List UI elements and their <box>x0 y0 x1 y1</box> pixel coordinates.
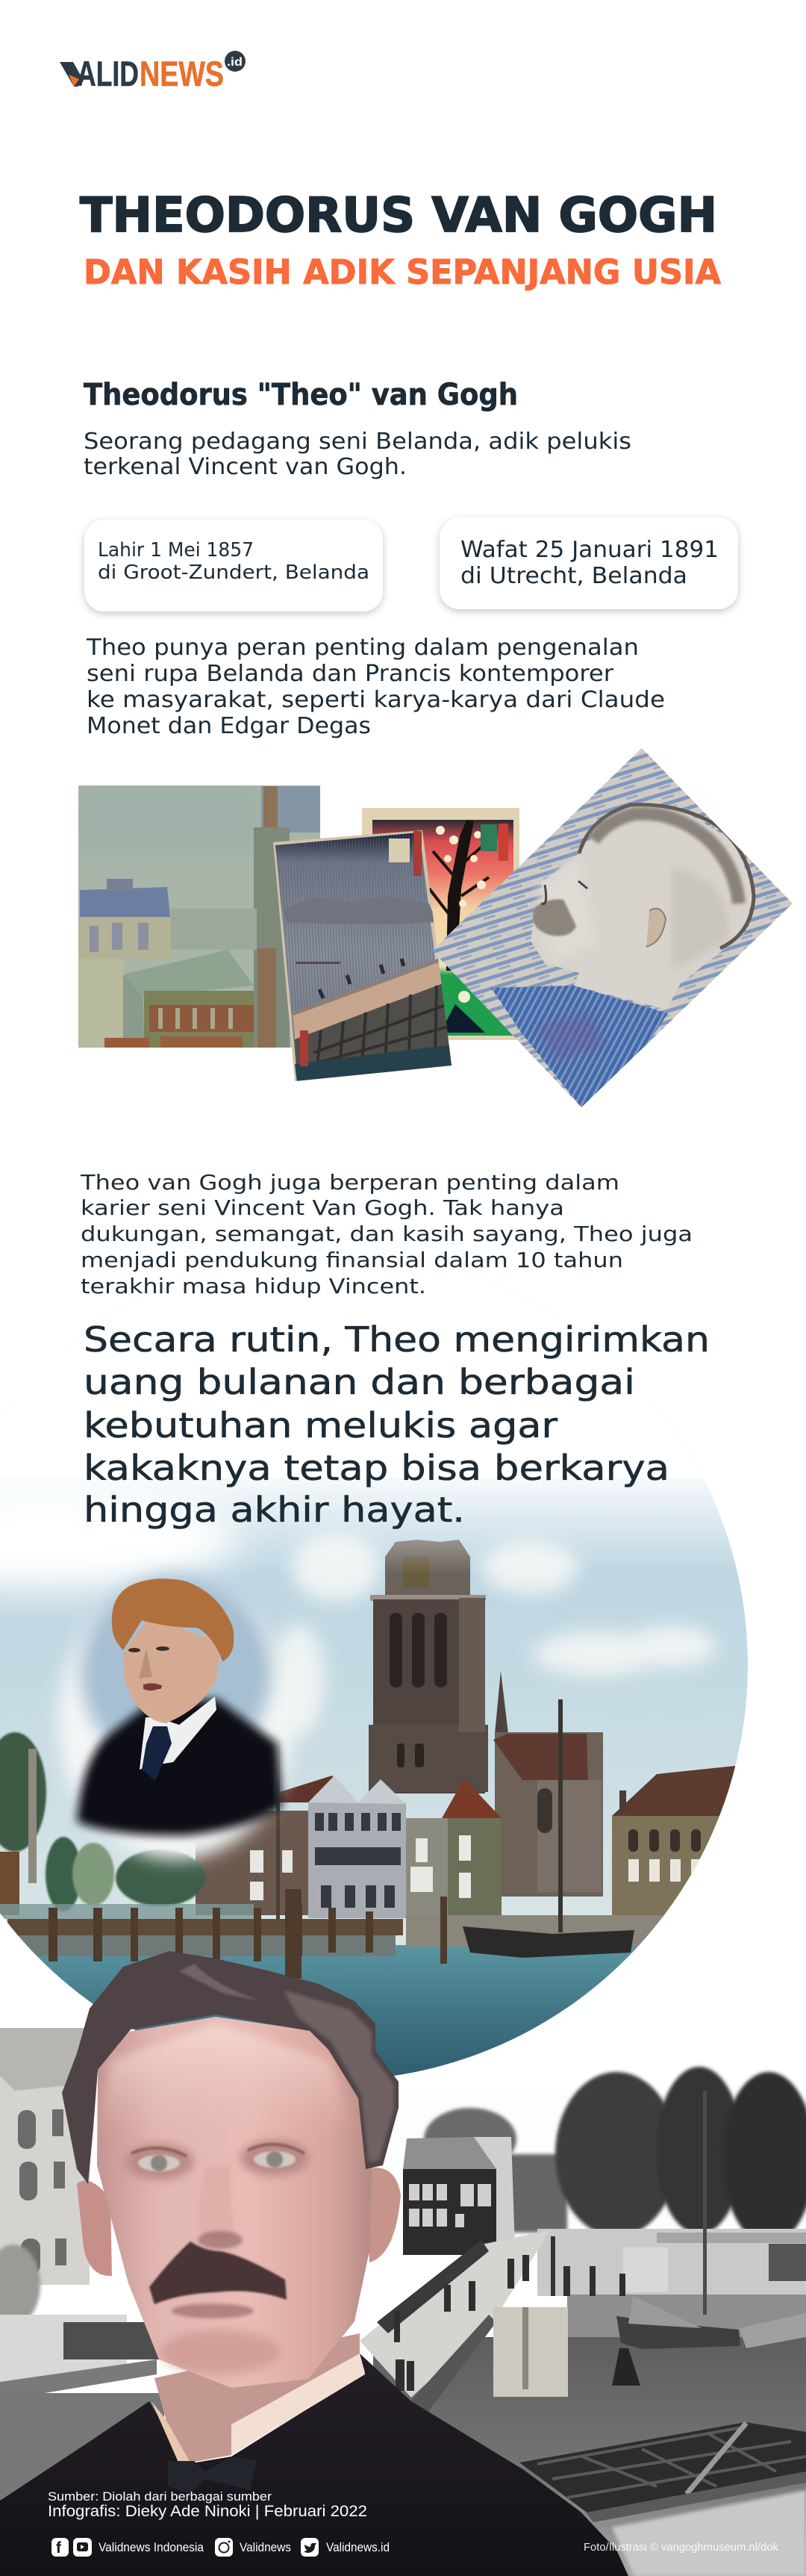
card: birth <box>84 520 383 612</box>
hair <box>62 1951 399 2184</box>
icon: twitter <box>301 2538 319 2557</box>
logo: Validnews.id: .id <box>227 56 243 69</box>
left building <box>0 2028 90 2285</box>
highlighted statement: hingga akhir hayat. <box>84 1490 465 1530</box>
intro paragraph: Seorang pedagang seni Belanda, adik pelukis <box>84 429 631 455</box>
top fade to white <box>0 1250 754 1478</box>
label: twitter: Validnews.id <box>326 2540 390 2554</box>
jacket <box>0 2353 628 2576</box>
water <box>373 2337 806 2576</box>
label: facebook and youtube: Validnews Indonesia <box>99 2540 204 2554</box>
source and credits: Infografis: Dieky Ade Ninoki | Februari 2022 <box>48 2503 367 2520</box>
heading: Theodorus "Theo" van Gogh: Theodorus "Theo" van Gogh <box>84 378 518 412</box>
highlighted statement: uang bulanan dan berbagai <box>84 1362 635 1402</box>
moustache <box>149 2241 287 2304</box>
paragraph: role in Vincent's career: dukungan, semangat, dan kasih sayang, Theo juga <box>81 1222 693 1246</box>
face <box>97 2017 372 2388</box>
lips shadow <box>172 2303 254 2318</box>
portrait: Theo van Gogh <box>0 1951 628 2576</box>
source and credits <box>48 2489 367 2520</box>
card: death: Wafat 25 Januari 1891 <box>460 537 719 563</box>
light water patch <box>612 2490 806 2576</box>
highlighted statement <box>84 1319 710 1530</box>
mooring post <box>612 2348 640 2386</box>
paragraph: role in Vincent's career: menjadi pendukung finansial dalam 10 tahun <box>81 1248 623 1272</box>
tower <box>369 1540 488 1793</box>
intro paragraph: terkenal Vincent van Gogh. <box>84 454 407 480</box>
paragraph: role in introducing art: Monet dan Edgar Degas <box>87 713 371 739</box>
photo credit: Foto/Ilustrasi © vangoghmuseum.nl/dok <box>584 2541 778 2554</box>
title: THEODORUS VAN GOGH <box>80 188 717 243</box>
trees left <box>0 1732 205 1915</box>
clouds <box>272 1534 716 1736</box>
highlighted statement: kakaknya tetap bisa berkarya <box>84 1448 669 1488</box>
left trees and bank <box>0 2244 40 2325</box>
quay and pier <box>0 1699 734 1979</box>
card: birth: Lahir 1 Mei 1857 <box>98 539 254 561</box>
source and credits: Sumber: Diolah dari berbagai sumber <box>48 2489 272 2504</box>
far trees <box>424 2108 516 2171</box>
icon: facebook <box>51 2538 69 2557</box>
paragraph: role in Vincent's career: karier seni Vincent Van Gogh. Tak hanya <box>81 1195 564 1220</box>
ears <box>77 2180 112 2276</box>
boat <box>616 2316 740 2349</box>
painting: view of Paris rooftops <box>78 785 320 1048</box>
paragraph: role in introducing art: seni rupa Belanda dan Prancis kontemporer <box>87 661 614 687</box>
paragraph: role in introducing art: Theo punya peran penting dalam pengenalan <box>86 635 639 661</box>
logo: Validnews.id: NEWS <box>140 54 224 93</box>
social media row <box>51 2538 390 2557</box>
highlighted statement: kebutuhan melukis agar <box>84 1405 557 1446</box>
paragraph: role in Vincent's career: terakhir masa hidup Vincent. <box>81 1274 426 1298</box>
small dark house <box>403 2137 496 2169</box>
painting: sudden shower over bridge print <box>273 830 459 1083</box>
nose <box>199 2165 235 2241</box>
subtitle: DAN KASIH ADIK SEPANJANG USIA <box>84 252 721 292</box>
paragraph: role in introducing art <box>86 635 665 739</box>
house row <box>196 1776 502 1918</box>
icon: facebook: f <box>56 2539 62 2557</box>
card: death: di Utrecht, Belanda <box>460 563 687 589</box>
circular colour photo: Dordrecht harbour <box>0 1250 754 2087</box>
intro paragraph <box>84 429 631 480</box>
label: instagram: Validnews <box>240 2540 291 2554</box>
neck and collar <box>151 2333 365 2494</box>
paragraph: role in Vincent's career: Theo van Gogh juga berperan penting dalam <box>80 1170 619 1195</box>
icon: youtube <box>73 2538 92 2557</box>
raft <box>519 2422 806 2516</box>
right building <box>612 1766 746 1917</box>
water <box>27 1945 639 2076</box>
painting: plum garden print <box>362 808 519 1040</box>
paragraph: role in Vincent's career <box>80 1170 693 1298</box>
far quay <box>537 2229 806 2296</box>
logo: Validnews.id <box>60 51 246 93</box>
card: death <box>440 517 738 609</box>
artwork collage <box>78 739 806 1113</box>
eye sockets and eyes <box>125 2140 309 2180</box>
bottom photo: canal and bridge, black and white <box>0 2028 806 2576</box>
highlighted statement: Secara rutin, Theo mengirimkan <box>84 1319 710 1360</box>
card: birth: di Groot-Zundert, Belanda <box>98 561 369 584</box>
icon: instagram <box>215 2538 233 2557</box>
church nave and spire <box>493 1671 603 1897</box>
paragraph: role in introducing art: ke masyarakat, seperti karya-karya dari Claude <box>87 687 665 713</box>
logo: Validnews.id: ALID <box>77 54 139 93</box>
portrait: Vincent van Gogh <box>58 1575 294 1859</box>
bridge road <box>360 2230 550 2398</box>
portrait drawing in diamond <box>432 748 793 1107</box>
